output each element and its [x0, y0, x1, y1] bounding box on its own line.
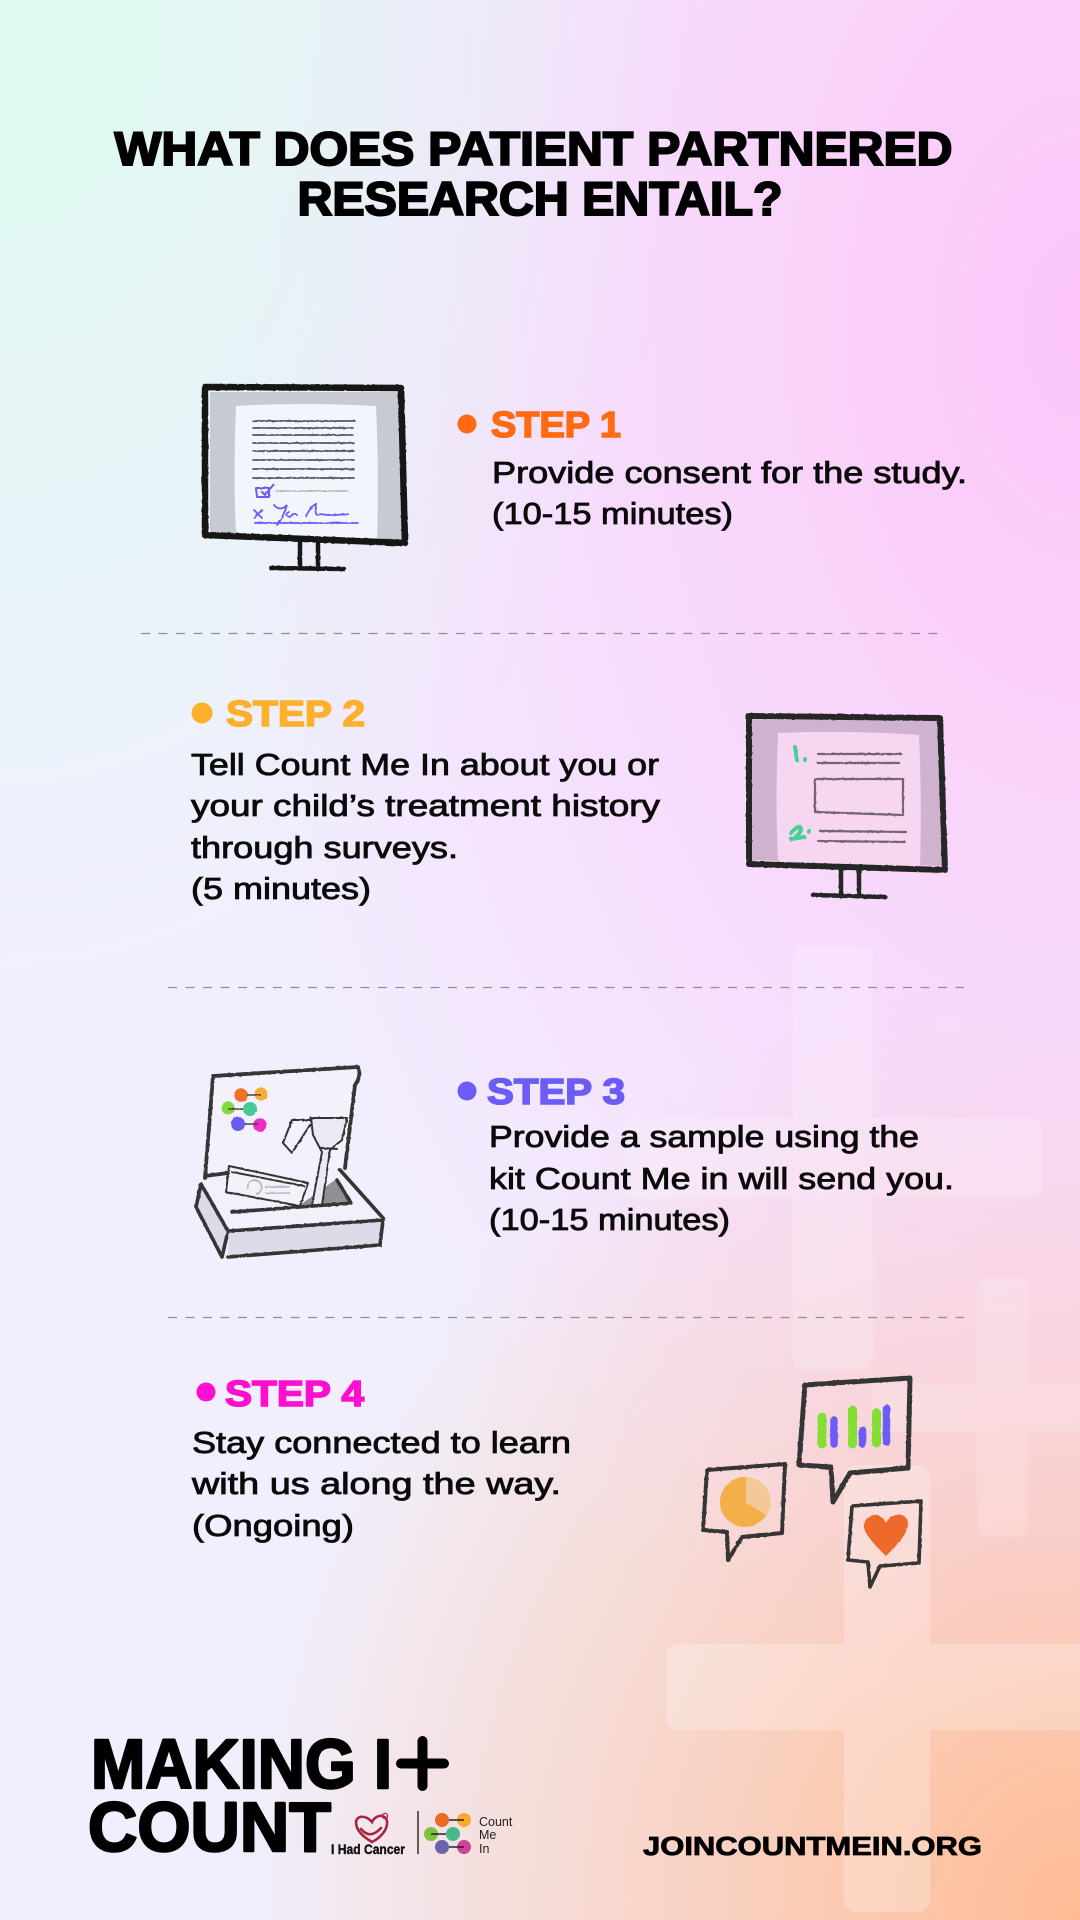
I Had Cancer logo — [331, 1813, 406, 1857]
title — [114, 122, 953, 225]
bubble: pie chart — [703, 1464, 785, 1560]
bullet step 1 — [458, 414, 476, 434]
step 1 — [458, 404, 967, 531]
I Had Cancer logo: I Had Cancer — [331, 1842, 406, 1857]
step 4: STEP 4 — [225, 1373, 364, 1414]
Count Me In logo: Me — [479, 1828, 496, 1842]
bullet step 3 — [458, 1082, 476, 1100]
logo: making it count — [88, 1725, 513, 1866]
title: WHAT DOES PATIENT PARTNERED — [114, 122, 953, 175]
Count Me In logo: In — [479, 1842, 489, 1856]
step 4: Stay connected to learn — [192, 1425, 571, 1460]
step 2: STEP 2 — [226, 693, 365, 734]
bullet step 4 — [196, 1382, 216, 1402]
website url: JOINCOUNTMEIN.ORG — [643, 1831, 982, 1861]
step 1: Provide consent for the study. — [492, 455, 967, 490]
Count Me In logo: Count — [479, 1815, 513, 1829]
step 1: STEP 1 — [491, 404, 621, 445]
step 2: (5 minutes) — [191, 871, 371, 906]
Count Me In logo — [424, 1813, 513, 1856]
bubble: heart — [848, 1501, 921, 1587]
step 3 — [458, 1071, 954, 1237]
logo dots on lid — [222, 1088, 268, 1132]
title: RESEARCH ENTAIL? — [298, 172, 782, 225]
icon: survey on monitor — [749, 716, 945, 897]
step 2: your child’s treatment history — [191, 788, 661, 823]
step 3: Provide a sample using the — [489, 1119, 919, 1154]
step 2 — [191, 693, 661, 906]
step 1: (10-15 minutes) — [492, 496, 733, 531]
step 3: (10-15 minutes) — [489, 1202, 730, 1237]
step 3: kit Count Me in will send you. — [489, 1161, 954, 1196]
step 4 — [191, 1373, 571, 1543]
step 2: through surveys. — [191, 830, 458, 865]
watermark plus signs — [624, 946, 1080, 1912]
step 2: Tell Count Me In about you or — [191, 747, 659, 782]
step 4: with us along the way. — [191, 1466, 561, 1501]
bubble: bar chart — [799, 1378, 910, 1502]
icon: speech bubbles with chart, pie, heart — [703, 1378, 921, 1587]
step 3: STEP 3 — [487, 1071, 625, 1112]
logo: making it count: MAKING I — [91, 1725, 392, 1803]
bullet step 2 — [192, 702, 212, 724]
icon: sample kit in box — [196, 1067, 383, 1257]
logo: making it count: COUNT — [88, 1788, 331, 1866]
icon: consent form on monitor — [205, 387, 405, 569]
step 4: (Ongoing) — [192, 1508, 354, 1543]
